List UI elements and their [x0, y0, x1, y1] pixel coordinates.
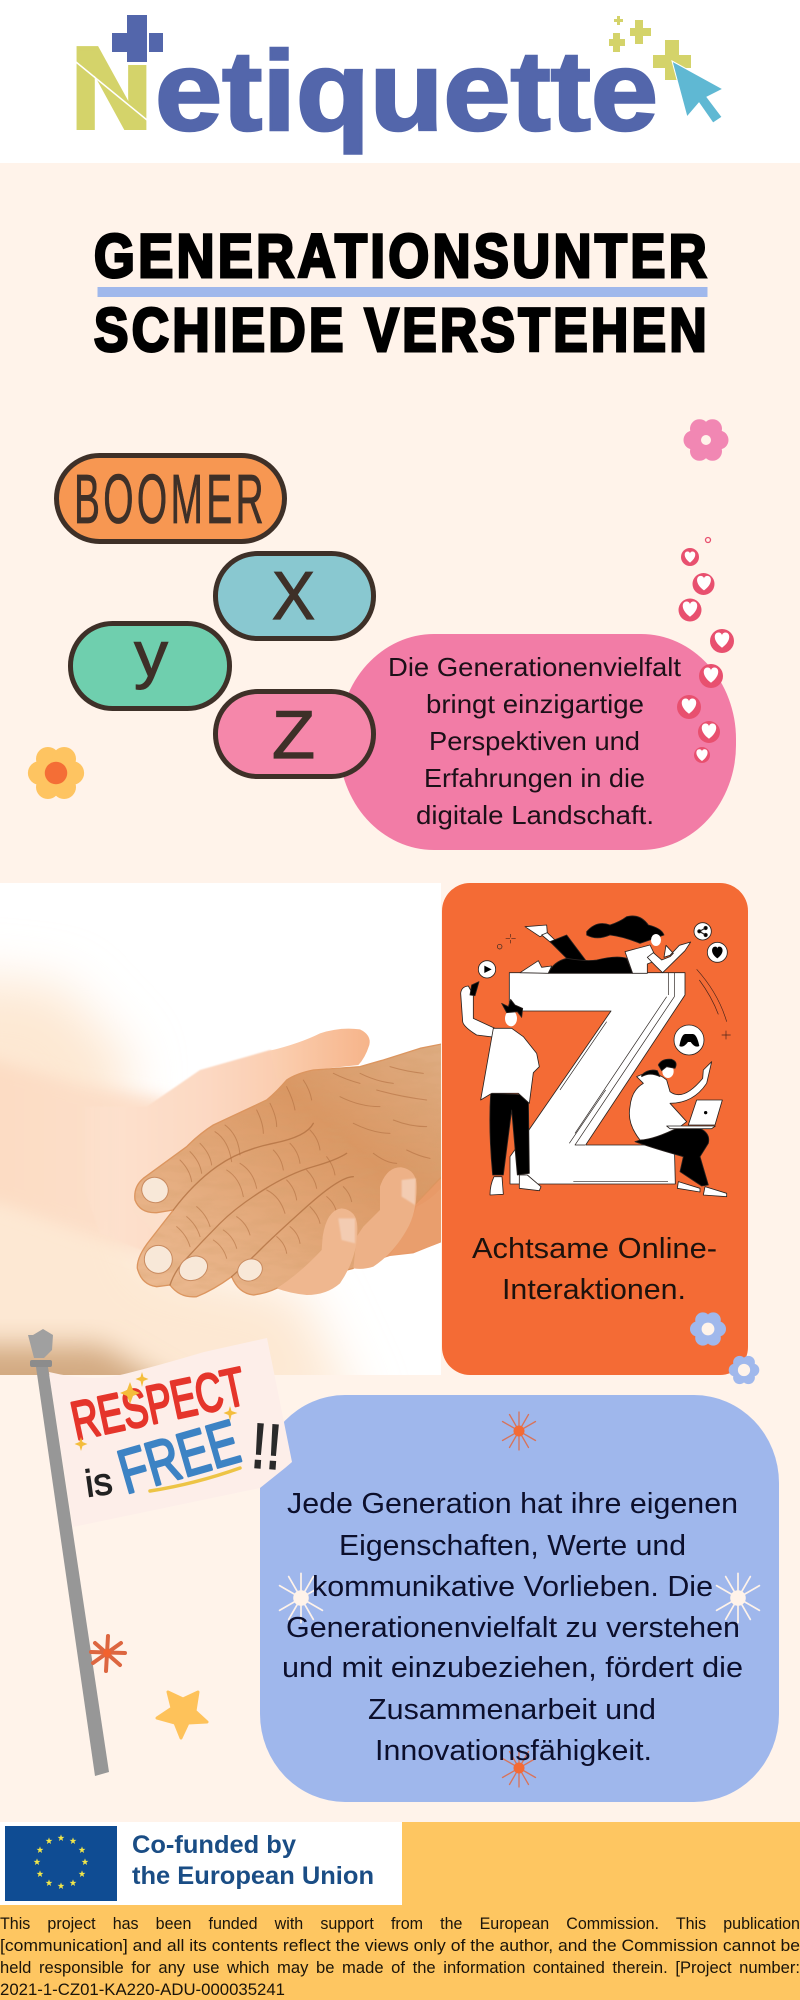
disclaimer text: This project has been funded with support from the European Commission. This publication — [0, 1915, 800, 1933]
sparkle top — [502, 1412, 536, 1450]
woman lying on top — [520, 916, 691, 973]
footer — [0, 1822, 800, 2000]
pink text blob — [339, 634, 736, 850]
panel: orange Gen Z card — [442, 883, 748, 1375]
card caption — [472, 1233, 717, 1306]
man taking selfie — [461, 982, 541, 1195]
logo letter N: N — [71, 23, 152, 153]
young thumb — [270, 1029, 370, 1080]
pill: Z: Z — [272, 697, 315, 773]
icon: orange asterisk — [91, 1636, 125, 1671]
blue panel text: Eigenschaften, Werte und — [339, 1530, 686, 1562]
blue panel text: und mit einzubeziehen, fördert die — [282, 1652, 743, 1684]
disclaimer text: [communication] and all its contents reflect the views only of the author, and the Commission cannot be — [0, 1937, 800, 1955]
blue panel text: Jede Generation hat ihre eigenen — [287, 1488, 738, 1520]
logo sparkle plusses — [609, 16, 691, 80]
social icons — [478, 923, 731, 1055]
panel: blue text — [260, 1395, 779, 1802]
flag text RESPECT: RESPECT — [66, 1356, 251, 1452]
big letter Z — [509, 973, 685, 1184]
flag pole — [28, 1329, 109, 1776]
sparkle white left — [280, 1573, 322, 1623]
flag underline and sparkles — [74, 1372, 240, 1491]
flag cloth — [49, 1338, 292, 1527]
hand skin texture — [140, 1264, 176, 1285]
logo: EU co-funded — [0, 1822, 402, 1905]
title: GENERATIONSUNTER — [94, 222, 710, 290]
icon: periwinkle flower — [690, 1312, 726, 1346]
old hand — [133, 1040, 447, 1300]
young fingers over — [277, 1167, 447, 1295]
pill: Z — [216, 692, 374, 776]
flag text is: is — [82, 1461, 115, 1506]
pink text blob: bringt einzigartige — [426, 689, 644, 719]
header: Netiquette logo — [0, 0, 800, 163]
blue panel text: Zusammenarbeit und — [368, 1694, 656, 1726]
sparkle bottom — [502, 1749, 536, 1787]
pill: X — [216, 554, 374, 638]
wrinkles — [177, 1067, 430, 1258]
disclaimer text: held responsible for any use which may be made of the information contained therein. [Project number: — [0, 1959, 800, 1977]
arm — [0, 1062, 172, 1252]
flag text exclamation: !! — [249, 1408, 284, 1484]
pink text blob: digitale Landschaft. — [416, 800, 654, 830]
young hand under right — [384, 1178, 441, 1258]
logo word etiquette: etiquette — [155, 28, 658, 154]
blue panel text: Generationenvielfalt zu verstehen — [286, 1612, 740, 1644]
blue panel text: Innovationsfähigkeit. — [375, 1735, 652, 1767]
pill: Y: y — [134, 618, 168, 690]
pill: BOOMER — [56, 456, 284, 542]
illustration: Z with young people — [461, 916, 731, 1197]
seated person with laptop — [629, 1059, 727, 1197]
pink text blob: Erfahrungen in die — [424, 763, 645, 793]
icon: pink flower — [684, 419, 728, 461]
panel: generations — [28, 419, 736, 850]
icon: rising hearts — [677, 538, 734, 763]
title — [94, 222, 710, 364]
flag: respect is free — [28, 1329, 292, 1776]
disclaimer text: 2021-1-CZ01-KA220-ADU-000035241 — [0, 1981, 285, 1999]
flag text FREE: FREE — [111, 1408, 247, 1507]
icon: orange flower — [28, 747, 84, 799]
co-funded text — [132, 1831, 374, 1890]
gaps between fingers — [170, 1123, 353, 1285]
young hand palm — [151, 1050, 286, 1160]
blue panel text — [282, 1488, 743, 1767]
sparkle white right — [717, 1573, 759, 1623]
photo: young and old hands — [0, 883, 441, 1375]
icon: EU flag — [5, 1826, 117, 1901]
pink text blob: Perspektiven und — [429, 726, 640, 756]
card caption: Interaktionen. — [502, 1274, 686, 1306]
co-funded text: the European Union — [132, 1862, 374, 1890]
blue panel text: kommunikative Vorlieben. Die — [312, 1571, 713, 1603]
pink text blob: Die Generationenvielfalt — [388, 652, 682, 682]
icon: small periwinkle flower — [729, 1356, 759, 1384]
logo plus on N — [112, 15, 163, 62]
co-funded text: Co-funded by — [132, 1831, 296, 1859]
pill: BOOMER: BOOMER — [74, 460, 267, 538]
disclaimer text — [0, 1915, 800, 1999]
cursor arrow — [672, 61, 723, 123]
icon: yellow star — [157, 1692, 207, 1738]
card caption: Achtsame Online- — [472, 1233, 717, 1265]
pill: Y — [70, 618, 230, 708]
pill: X: X — [272, 558, 315, 634]
fingernails — [138, 1174, 266, 1285]
